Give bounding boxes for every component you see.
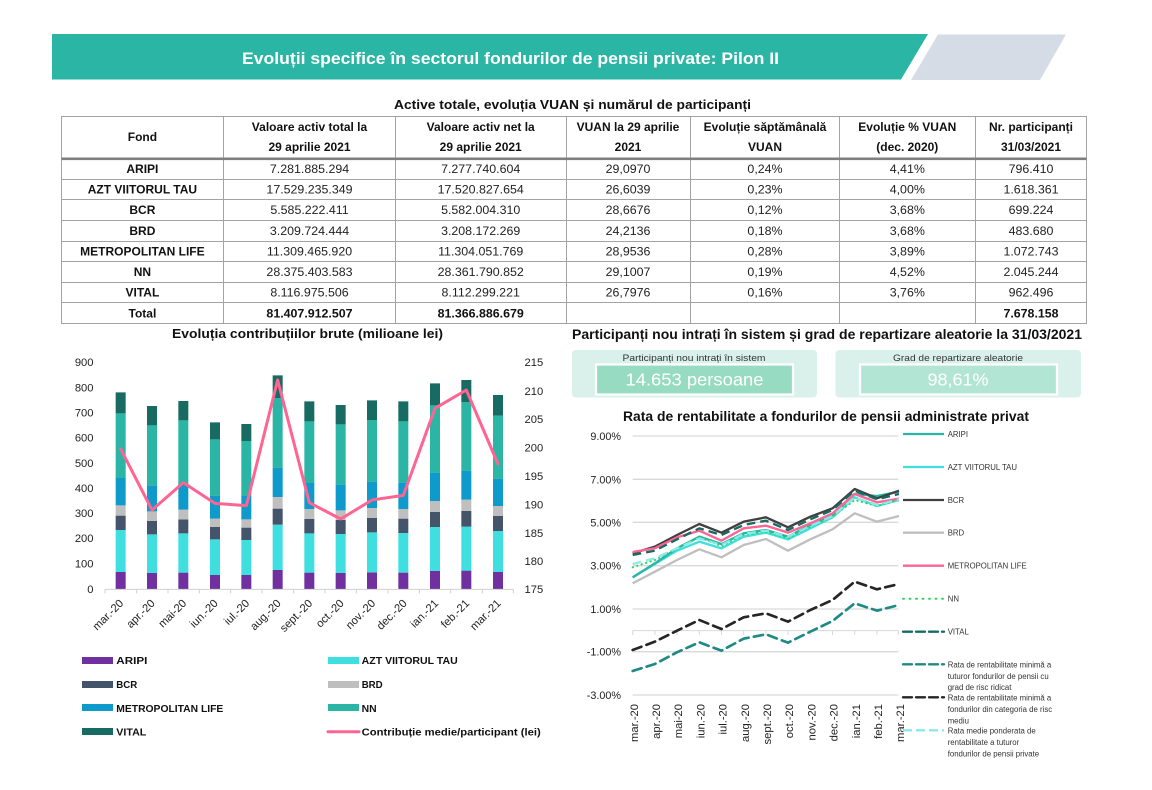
heading: participanti: Participanți nou intrați în sistem și grad de repartizare aleatorie la 31/03/2021 bbox=[572, 327, 1083, 342]
x axis labels: sept.-20 bbox=[278, 598, 315, 635]
row: BCR bbox=[129, 203, 1053, 217]
legend: rata de rentabilitate: METROPOLITAN LIFE bbox=[948, 562, 1027, 571]
legend: bar chart: BRD bbox=[362, 680, 383, 691]
x axis labels: aug.-20 bbox=[740, 704, 752, 742]
left axis labels: 900 bbox=[75, 357, 94, 369]
row: NN: NN bbox=[134, 265, 151, 279]
y axis labels: 3.00% bbox=[590, 561, 621, 573]
y axis labels: -1.00% bbox=[587, 647, 621, 659]
line: BCR bbox=[633, 489, 899, 553]
legend: rata de rentabilitate: NN bbox=[948, 595, 959, 604]
row: METROPOLITAN LIFE: 3,89% bbox=[890, 244, 925, 258]
card: participanti noi: Participanți nou intrați în sistem bbox=[622, 353, 766, 364]
line: BRD bbox=[633, 513, 899, 583]
bars: BCR bbox=[116, 509, 503, 540]
table header: 29 aprilie 2021 bbox=[440, 140, 522, 154]
right axis labels: 215 bbox=[524, 357, 543, 369]
right axis labels: 185 bbox=[524, 528, 543, 540]
row: AZT VIITORUL TAU: 17.529.235.349 bbox=[266, 182, 353, 196]
row: Total bbox=[129, 306, 1059, 320]
x axis labels: sept.-20 bbox=[762, 704, 774, 744]
x axis labels: aug.-20 bbox=[248, 598, 284, 633]
table title: Active totale, evoluția VUAN și numărul de participanți bbox=[394, 97, 751, 112]
row: AZT VIITORUL TAU: 26,6039 bbox=[606, 182, 650, 196]
table header: 31/03/2021 bbox=[1001, 140, 1061, 154]
row: VITAL: 8.116.975.506 bbox=[270, 286, 349, 300]
left axis labels bbox=[75, 357, 94, 596]
x axis labels: nov.-20 bbox=[344, 598, 378, 632]
right axis labels: 200 bbox=[524, 442, 543, 454]
row: Total: 7.678.158 bbox=[1003, 306, 1059, 320]
table header: Evoluție săptămânală bbox=[704, 120, 827, 134]
row: ARIPI: 796.410 bbox=[1009, 162, 1053, 176]
y axis labels: -3.00% bbox=[587, 690, 621, 702]
legend: rata de rentabilitate: Rata medie ponderata de bbox=[948, 726, 1036, 735]
row: BRD: 483.680 bbox=[1009, 224, 1053, 238]
row: Total: 81.366.886.679 bbox=[438, 306, 524, 320]
left axis labels: 800 bbox=[75, 382, 94, 394]
x axis labels: mar.-20 bbox=[629, 704, 641, 742]
row: BRD: 0,18% bbox=[747, 224, 783, 238]
x axis labels: dec.-20 bbox=[828, 704, 840, 741]
row: METROPOLITAN LIFE: 1.072.743 bbox=[1003, 244, 1059, 258]
x axis labels: apr.-20 bbox=[124, 598, 158, 631]
legend: rata de rentabilitate: fondurilor din categoria de risc bbox=[948, 705, 1052, 714]
row: AZT VIITORUL TAU: 0,23% bbox=[747, 182, 783, 196]
x axis labels: mai-20 bbox=[673, 704, 685, 738]
row: Total: Total bbox=[129, 306, 156, 320]
table header: Nr. participanți bbox=[989, 120, 1073, 134]
x axis labels: iun.-20 bbox=[696, 704, 708, 738]
legend: rata de rentabilitate bbox=[903, 430, 1052, 758]
table header bbox=[128, 120, 1073, 154]
table header: Fond bbox=[128, 130, 157, 144]
line: rata medie ponderata bbox=[633, 497, 899, 564]
x axis bbox=[105, 589, 513, 593]
row: METROPOLITAN LIFE: METROPOLITAN LIFE bbox=[80, 244, 205, 258]
table header: Evoluție % VUAN bbox=[858, 120, 956, 134]
legend: bar chart: NN bbox=[362, 704, 377, 715]
table: active totale bbox=[62, 116, 1086, 324]
line: ARIPI bbox=[633, 492, 899, 577]
legend: rata de rentabilitate: grad de risc ridicat bbox=[948, 683, 1012, 692]
x axis labels: mar.-21 bbox=[468, 598, 504, 633]
row: VITAL: 8.112.299.221 bbox=[442, 286, 520, 300]
legend: rata de rentabilitate: VITAL bbox=[948, 628, 969, 637]
card: participanti noi: 14.653 persoane bbox=[626, 370, 764, 390]
row: METROPOLITAN LIFE: 11.309.465.920 bbox=[267, 244, 352, 258]
row: BRD: 3,68% bbox=[890, 224, 925, 238]
x axis labels bbox=[91, 598, 504, 635]
row: BCR: 5.585.222.411 bbox=[270, 203, 349, 217]
row: NN: 2.045.244 bbox=[1003, 265, 1059, 279]
row: VITAL: 3,76% bbox=[890, 286, 925, 300]
y axis labels: 1.00% bbox=[590, 604, 621, 616]
row: VITAL: 962.496 bbox=[1009, 286, 1053, 300]
legend: rata de rentabilitate: ARIPI bbox=[948, 430, 968, 439]
row: ARIPI: 7.277.740.604 bbox=[441, 162, 520, 176]
legend: bar chart: METROPOLITAN LIFE bbox=[116, 704, 224, 715]
left axis labels: 300 bbox=[75, 508, 94, 520]
x axis labels: oct.-20 bbox=[784, 704, 796, 738]
x axis labels: apr.-20 bbox=[651, 704, 663, 739]
line: NN bbox=[633, 500, 899, 567]
row: METROPOLITAN LIFE: 0,28% bbox=[747, 244, 783, 258]
row: NN: 4,52% bbox=[890, 265, 925, 279]
header banner bbox=[52, 34, 1066, 80]
x axis labels: feb.-21 bbox=[873, 704, 885, 739]
row: BRD: 24,2136 bbox=[606, 224, 650, 238]
x axis labels: oct.-20 bbox=[314, 598, 347, 630]
y axis labels bbox=[587, 431, 621, 702]
right axis labels: 190 bbox=[524, 500, 543, 512]
row: ARIPI: ARIPI bbox=[126, 162, 158, 176]
bars: ARIPI bbox=[116, 570, 503, 589]
row: METROPOLITAN LIFE: 11.304.051.769 bbox=[438, 244, 523, 258]
x axis labels: iul.-20 bbox=[718, 704, 730, 734]
table header: 29 aprilie 2021 bbox=[268, 140, 351, 154]
legend: bar chart: AZT VIITORUL TAU bbox=[362, 656, 458, 667]
row: AZT VIITORUL TAU: AZT VIITORUL TAU bbox=[88, 182, 197, 196]
legend: bar chart: VITAL bbox=[116, 728, 146, 738]
left axis labels: 600 bbox=[75, 432, 94, 444]
row: ARIPI: 0,24% bbox=[747, 162, 783, 176]
row: BRD bbox=[129, 224, 1053, 238]
row: BCR: 5.582.004.310 bbox=[441, 203, 520, 217]
bars: METROPOLITAN LIFE bbox=[116, 468, 503, 519]
table header: 2021 bbox=[615, 140, 642, 154]
row: BCR: BCR bbox=[129, 203, 156, 217]
legend: rata de rentabilitate: mediu bbox=[948, 716, 969, 725]
title: Evoluții specifice în sectorul fondurilor de pensii private: Pilon II bbox=[242, 49, 779, 68]
x axis labels: iun.-20 bbox=[188, 598, 221, 630]
row: AZT VIITORUL TAU: 17.520.827.654 bbox=[438, 182, 524, 196]
line: rata minima risc ridicat bbox=[633, 603, 899, 671]
legend: bar chart bbox=[82, 656, 541, 738]
row: BRD: 3.209.724.444 bbox=[270, 224, 349, 238]
x axis labels: mai-20 bbox=[156, 598, 189, 630]
y axis labels: 5.00% bbox=[590, 517, 621, 529]
right axis labels: 175 bbox=[524, 584, 543, 596]
row: BCR: 699.224 bbox=[1009, 203, 1053, 217]
legend: rata de rentabilitate: Rata de rentabilitate minimă a bbox=[948, 693, 1052, 702]
card: grad de repartizare: 98,61% bbox=[928, 370, 988, 390]
line: AZT VIITORUL TAU bbox=[633, 497, 899, 577]
table header: VUAN bbox=[748, 140, 782, 154]
row: NN: 0,19% bbox=[747, 265, 783, 279]
row: NN: 28.375.403.583 bbox=[266, 265, 353, 279]
row: NN bbox=[134, 265, 1059, 279]
left axis labels: 400 bbox=[75, 483, 94, 495]
card: grad de repartizare bbox=[836, 350, 1081, 398]
legend: bar chart: BCR bbox=[116, 680, 138, 691]
chart: rata de rentabilitate bbox=[587, 431, 907, 744]
row: VITAL bbox=[126, 286, 1053, 300]
x axis labels: mar.-21 bbox=[895, 704, 907, 742]
left axis labels: 500 bbox=[75, 458, 94, 470]
row: BRD: 3.208.172.269 bbox=[441, 224, 520, 238]
legend: rata de rentabilitate: BRD bbox=[948, 529, 965, 538]
left axis labels: 100 bbox=[75, 558, 94, 570]
row: NN: 28.361.790.852 bbox=[438, 265, 524, 279]
row: ARIPI: 4,41% bbox=[890, 162, 925, 176]
bars: NN bbox=[116, 398, 503, 496]
legend: rata de rentabilitate: Rata de rentabilitate minimă a bbox=[948, 660, 1052, 669]
row: BCR: 0,12% bbox=[747, 203, 783, 217]
legend: bar chart: ARIPI bbox=[116, 656, 147, 667]
row: ARIPI: 29,0970 bbox=[606, 162, 650, 176]
row: Total: 81.407.912.507 bbox=[266, 306, 353, 320]
left axis labels: 700 bbox=[75, 408, 94, 420]
bars: AZT VIITORUL TAU bbox=[116, 525, 503, 575]
line: contributie medie/participant bbox=[121, 380, 498, 519]
row: VITAL: 0,16% bbox=[747, 286, 783, 300]
y axis labels: 7.00% bbox=[590, 474, 621, 486]
x axis labels: ian.-21 bbox=[408, 598, 441, 630]
x axis labels: dec.-20 bbox=[375, 598, 410, 633]
line: Metropolitan Life bbox=[633, 494, 899, 552]
x axis labels: feb.-21 bbox=[439, 598, 472, 631]
row: BCR: 3,68% bbox=[890, 203, 925, 217]
row: VITAL: 26,7976 bbox=[606, 286, 650, 300]
table header: Valoare activ total la bbox=[252, 120, 368, 134]
legend: bar chart: Contribuție medie/participant (lei) bbox=[362, 728, 541, 738]
legend: rata de rentabilitate: AZT VIITORUL TAU bbox=[948, 463, 1017, 472]
card: grad de repartizare: Grad de repartizare aleatorie bbox=[893, 353, 1023, 364]
right axis labels bbox=[524, 357, 543, 596]
row: METROPOLITAN LIFE: 28,9536 bbox=[606, 244, 650, 258]
legend: rata de rentabilitate: tuturor fondurilor de pensii cu bbox=[948, 672, 1049, 681]
line: rata minima risc mediu bbox=[633, 582, 899, 650]
left axis labels: 0 bbox=[87, 584, 94, 596]
bars: VITAL bbox=[116, 375, 503, 441]
heading: rata de rentabilitate: Rata de rentabilitate a fondurilor de pensii administrate privat bbox=[623, 409, 1030, 424]
chart: stacked bars with line bbox=[75, 357, 543, 635]
row: AZT VIITORUL TAU bbox=[88, 182, 1059, 196]
row: AZT VIITORUL TAU: 1.618.361 bbox=[1003, 182, 1059, 196]
x axis labels bbox=[629, 704, 907, 744]
right axis labels: 195 bbox=[524, 471, 543, 483]
right axis labels: 210 bbox=[524, 386, 543, 398]
table header: (dec. 2020) bbox=[876, 140, 938, 154]
legend: rata de rentabilitate: BCR bbox=[948, 496, 965, 505]
left axis labels: 200 bbox=[75, 533, 94, 545]
legend: rata de rentabilitate: fondurilor de pensii private bbox=[948, 749, 1039, 758]
row: VITAL: VITAL bbox=[126, 286, 159, 300]
bars: BRD bbox=[116, 497, 503, 528]
row: AZT VIITORUL TAU: 4,00% bbox=[890, 182, 925, 196]
x axis labels: ian.-21 bbox=[851, 704, 863, 738]
row: BRD: BRD bbox=[129, 224, 156, 238]
row: ARIPI bbox=[126, 162, 1053, 176]
x axis labels: nov.-20 bbox=[806, 704, 818, 740]
right axis labels: 205 bbox=[524, 414, 543, 426]
row: BCR: 28,6676 bbox=[606, 203, 650, 217]
card: participanti noi bbox=[572, 350, 817, 398]
x axis labels: mar.-20 bbox=[91, 598, 126, 633]
legend: rata de rentabilitate: rentabilitate a tuturor bbox=[948, 738, 1020, 747]
y axis labels: 9.00% bbox=[590, 431, 621, 443]
row: NN: 29,1007 bbox=[606, 265, 650, 279]
right axis labels: 180 bbox=[524, 556, 543, 568]
table header: Valoare activ net la bbox=[427, 120, 535, 134]
line: VITAL bbox=[633, 491, 899, 555]
x axis labels: iul.-20 bbox=[222, 598, 252, 628]
row: METROPOLITAN LIFE bbox=[80, 244, 1059, 258]
table header: VUAN la 29 aprilie bbox=[577, 120, 680, 134]
heading: contributii brute: Evoluția contribuțiilor brute (milioane lei) bbox=[172, 326, 443, 341]
row: ARIPI: 7.281.885.294 bbox=[270, 162, 349, 176]
